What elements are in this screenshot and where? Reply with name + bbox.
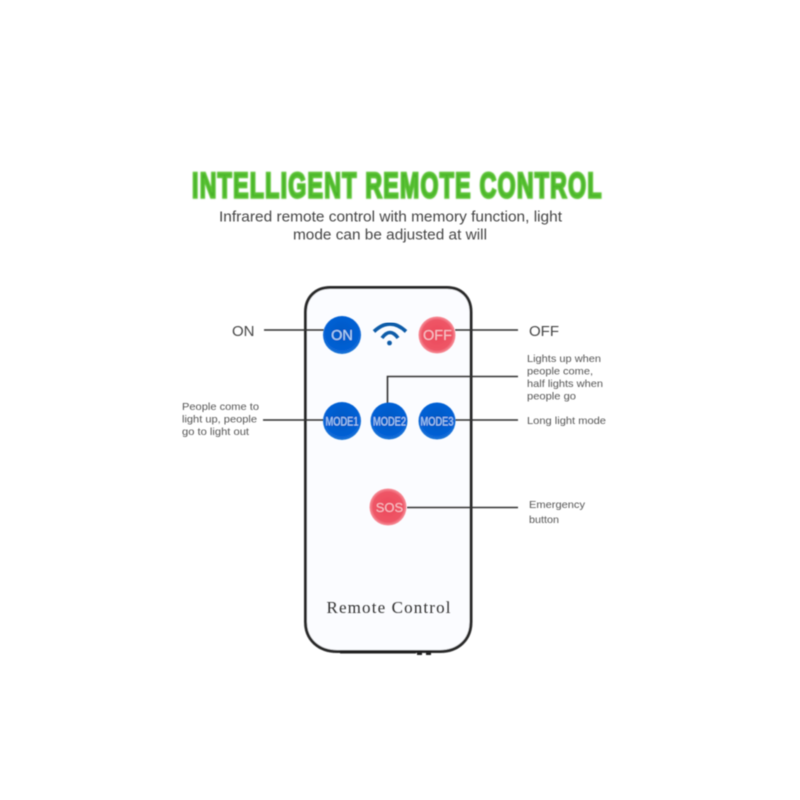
label: OFF: OFF bbox=[529, 323, 559, 340]
label: MODE2 description bbox=[527, 353, 603, 402]
button: MODE1: MODE1 bbox=[326, 414, 359, 428]
button: MODE3 bbox=[418, 402, 456, 440]
label: MODE2 description: people go bbox=[527, 390, 576, 402]
label: MODE3 description: Long light mode bbox=[527, 415, 606, 427]
remote label: Remote Control bbox=[326, 598, 451, 617]
button: MODE2: MODE2 bbox=[373, 414, 406, 428]
label: MODE1 description: People come to bbox=[182, 401, 259, 413]
label: SOS description bbox=[529, 499, 586, 526]
label: MODE2 description: half lights when bbox=[527, 378, 603, 390]
button: MODE1 bbox=[323, 402, 361, 440]
label: MODE1 description bbox=[182, 401, 259, 438]
remote control body bbox=[306, 288, 471, 655]
icon: wifi signal bbox=[374, 324, 406, 345]
button: OFF: OFF bbox=[423, 328, 452, 344]
leader lines bbox=[263, 330, 518, 508]
button: MODE2 bbox=[370, 402, 408, 440]
button: SOS bbox=[370, 488, 406, 526]
label: SOS description: Emergency bbox=[529, 499, 586, 511]
label: MODE2 description: Lights up when bbox=[527, 353, 601, 365]
subtitle: mode can be adjusted at will bbox=[293, 228, 487, 244]
subtitle bbox=[219, 210, 562, 244]
label: MODE1 description: light up, people bbox=[182, 414, 257, 426]
button: ON bbox=[323, 316, 361, 354]
label: ON: ON bbox=[232, 323, 254, 340]
label: MODE1 description: go to light out bbox=[182, 426, 249, 438]
title: INTELLIGENT REMOTE CONTROL bbox=[192, 167, 602, 206]
label: SOS description: button bbox=[529, 514, 559, 526]
subtitle: Infrared remote control with memory function, light bbox=[219, 210, 562, 226]
button: ON: ON bbox=[331, 328, 353, 344]
button: SOS: SOS bbox=[376, 500, 404, 515]
button: OFF bbox=[418, 316, 456, 354]
button: MODE3: MODE3 bbox=[420, 414, 454, 428]
label: MODE2 description: people come, bbox=[527, 366, 593, 378]
